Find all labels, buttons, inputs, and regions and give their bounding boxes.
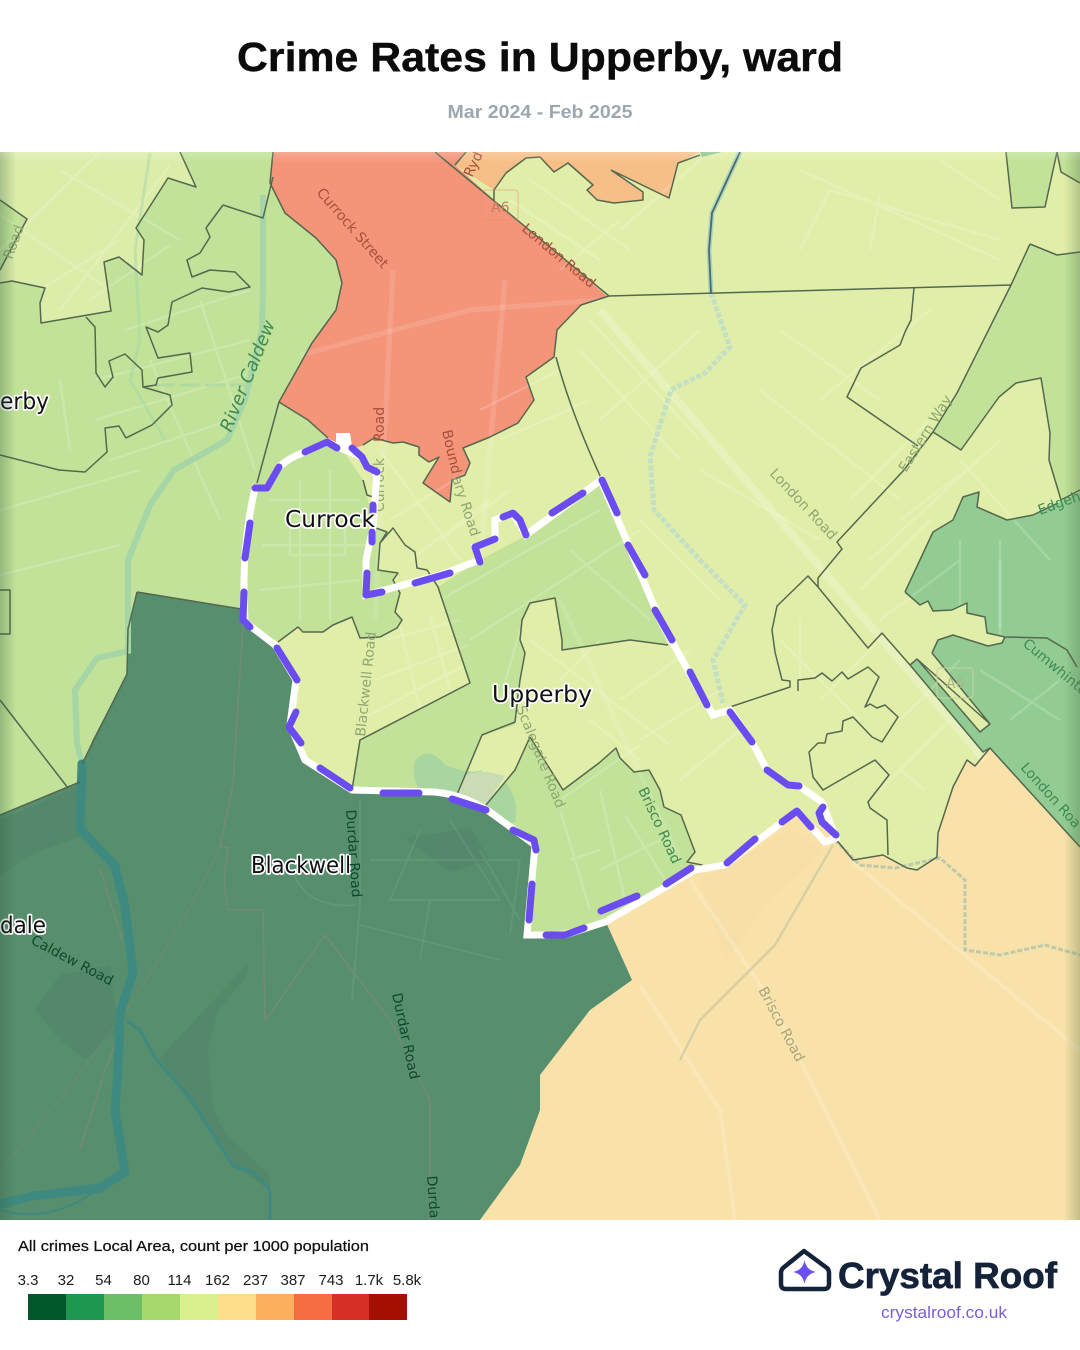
- map edge vignette: [0, 152, 1080, 1220]
- London Road main road: [600, 310, 985, 760]
- legend tick labels: 5.8k: [393, 1272, 422, 1289]
- road label: Blackwell Road: Blackwell Road: [353, 631, 380, 737]
- main roads: [300, 270, 680, 860]
- region: small green top edge: [700, 152, 722, 157]
- streets: [0, 152, 1060, 910]
- logo wordmark: Crystal Roof: [838, 1255, 1058, 1296]
- icon: house with star: [781, 1251, 829, 1289]
- road label: A6 shield east: A6: [946, 676, 965, 692]
- region boundary: grey lines in Blackwell: [0, 625, 430, 1220]
- road label: London Road middle: London Road: [766, 466, 840, 543]
- streets: Blackwell faint: [290, 800, 520, 1000]
- road labels: [1, 149, 1080, 1219]
- road label: Currock Street: Currock Street: [313, 185, 392, 272]
- road label: A6 shield east: [937, 668, 973, 698]
- label: Currock: Currock: [285, 507, 376, 533]
- legend tick labels: 387: [280, 1272, 306, 1289]
- region: south Upperby green: [506, 738, 696, 932]
- region: Edgehill mid green: [905, 492, 1080, 667]
- label: Upperby: Upperby: [492, 682, 592, 708]
- legend colour scale: [28, 1294, 407, 1320]
- legend tick labels: 1.7k: [355, 1272, 384, 1289]
- ward boundary: purple dashes: [243, 442, 836, 935]
- subtitle: date range: Mar 2024 - Feb 2025: [448, 102, 632, 122]
- region: green top right corner: [1057, 152, 1080, 183]
- road label: A6 shield north: [482, 190, 518, 220]
- region: pale grey playing field: [456, 772, 505, 805]
- logo: Crystal Roof: [781, 1251, 1058, 1322]
- region: orange north: [455, 152, 700, 203]
- choropleth map: [0, 149, 1080, 1220]
- road label: Brisco Road lower: Brisco Road: [754, 984, 807, 1065]
- region: west green: [0, 152, 342, 815]
- region boundary lines: [0, 152, 1080, 872]
- legend tick labels: 32: [58, 1272, 74, 1289]
- label: Cummersdale fragment: dale: [0, 913, 46, 939]
- logo url: crystalroof.co.uk: [881, 1304, 1008, 1322]
- region: green top right block: [1006, 152, 1057, 208]
- region: A6 pale sliver: [934, 656, 989, 731]
- legend: [18, 1238, 422, 1320]
- place labels: [0, 389, 592, 939]
- legend tick labels: 114: [168, 1272, 191, 1289]
- region: tan south-east: [480, 748, 1080, 1220]
- region: mid-green north-east: [933, 244, 1080, 500]
- road label: Durdar Road bottom: Durda: [423, 1175, 442, 1219]
- title: Crime Rates in Upperby, ward: [237, 34, 843, 80]
- road label: Rydal: Ryd: [461, 149, 487, 180]
- road label: Boundary Road lower: ary Road: [448, 474, 483, 538]
- road label: Scalegate Road: Scalegate Road: [512, 704, 568, 810]
- road label: Caldew Road: Caldew Road: [28, 932, 116, 989]
- ward boundary: white outline: [244, 442, 836, 935]
- road label: Currock Road upper: Road: [372, 407, 388, 442]
- road label: Boundary Road: Bound: [438, 428, 464, 476]
- region: tan shading: [700, 830, 825, 960]
- road label: A6 shield north: A6: [491, 200, 510, 216]
- river Caldew: [0, 153, 270, 1220]
- region: central Upperby green: [352, 480, 668, 797]
- tan road lines: [640, 860, 1080, 1220]
- road label: River Caldew: River Caldew: [216, 317, 280, 435]
- road label: Road fragment top-left: Road: [1, 223, 28, 261]
- legend tick labels: 162: [205, 1272, 230, 1289]
- river Petteril: [650, 152, 1080, 955]
- road label: Currock Road lower, under ward line: Currock: [372, 457, 388, 512]
- road label: Durdar Road lower: Durdar Road: [388, 992, 422, 1081]
- region: green patch by ward edge: [486, 782, 516, 825]
- tan grey road: [680, 845, 833, 1060]
- region: Currock green: [245, 402, 402, 642]
- region: A6 green stripe: [911, 660, 982, 749]
- region: high-crime red: [270, 152, 608, 502]
- road label: Eastern Way: Eastern Way: [896, 392, 956, 475]
- legend tick labels: [18, 1272, 422, 1289]
- region: north-west pale area: [0, 152, 196, 323]
- legend tick labels: 3.3: [18, 1272, 38, 1289]
- road label: Brisco Road upper: Brisco Road: [634, 785, 684, 866]
- legend tick labels: 237: [243, 1272, 268, 1289]
- label: Blackwell: Blackwell: [251, 853, 351, 879]
- legend tick labels: 743: [318, 1272, 344, 1289]
- road label: Durdar Road upper: Durdar Road: [342, 809, 364, 898]
- region: green pond area: [414, 754, 482, 795]
- road label: London Road north: London Road: [518, 221, 598, 291]
- region: small green top-left: [0, 200, 27, 270]
- ward boundary: white nub: [336, 433, 352, 454]
- legend tick labels: 54: [95, 1272, 112, 1289]
- region: dark green Blackwell: [0, 592, 632, 1220]
- legend tick labels: 80: [133, 1272, 150, 1289]
- label: Denton Holme fragment: erby: [0, 389, 49, 415]
- region: Cumwhinton mid green: [932, 635, 1080, 847]
- legend title: All crimes Local Area, count per 1000 population: [18, 1238, 369, 1255]
- region: darker tone patches: [0, 785, 490, 1190]
